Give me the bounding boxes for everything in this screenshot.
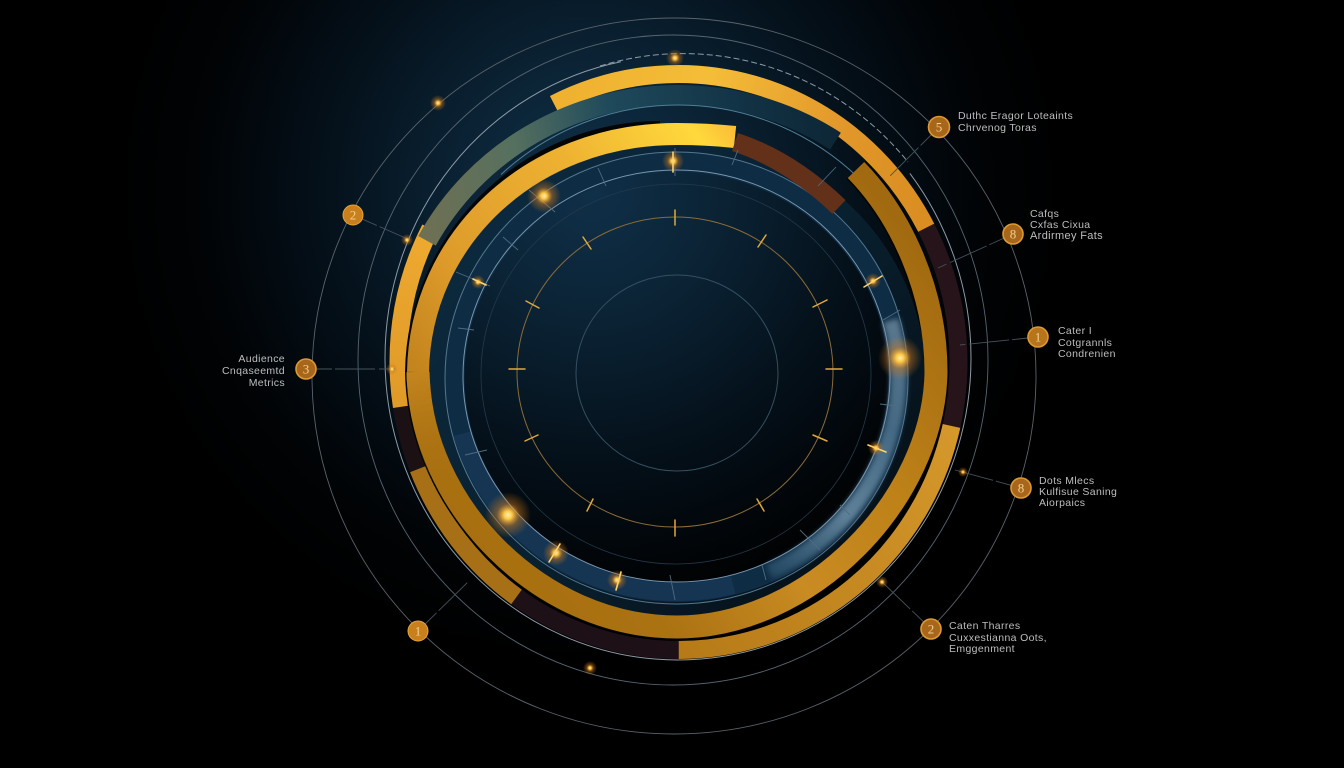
outer ring segments <box>398 74 958 650</box>
node 7: upper left: 2 <box>350 208 356 222</box>
blue band ring <box>439 148 915 612</box>
node 7: upper left <box>343 205 363 225</box>
node 2: upper right: Cafqs <box>1030 208 1059 220</box>
central circles <box>517 217 833 527</box>
outer segment: left bright gold <box>398 74 958 650</box>
node 6: bottom left <box>408 621 428 641</box>
node 8: left: Cnqaseemtd <box>222 365 285 377</box>
connector lines <box>306 127 1038 631</box>
outer thin rings <box>312 18 1036 734</box>
inner segment: left fade overlay <box>418 372 445 482</box>
inner ring dark gap <box>418 134 936 627</box>
inner segment: lower gold <box>418 170 936 627</box>
node 6: bottom left: 1 <box>415 624 421 638</box>
node 2: upper right: Cxfas Cixua <box>1030 219 1090 231</box>
node 8: left: 3 <box>303 362 309 376</box>
outer segment: lower right gold <box>398 74 958 650</box>
node 1: top right: 5 <box>936 120 942 134</box>
node 8: left: Metrics <box>249 377 285 389</box>
node 5: bottom right: Cuxxestianna Oots, <box>949 632 1047 644</box>
node 4: lower right: Kulfisue Saning <box>1039 486 1117 498</box>
teal band segment <box>393 95 963 649</box>
teal band lower hairline <box>415 105 941 639</box>
node 3: right: 1 <box>1035 330 1041 344</box>
node 4: lower right <box>1011 475 1117 509</box>
node 3: right <box>1028 325 1116 360</box>
outer segment: lower left gold <box>398 74 958 650</box>
node 5: bottom right <box>921 619 1047 655</box>
node 4: lower right: Dots Mlecs <box>1039 475 1094 487</box>
sparkle glows <box>386 49 968 675</box>
inner segment: upper bright gold <box>418 134 735 372</box>
outer segment: right dark <box>398 74 958 650</box>
band inner hairlines <box>445 152 908 604</box>
radial scale ticks <box>456 148 900 600</box>
node 3: right: Condrenien <box>1058 348 1116 360</box>
node 4: lower right: 8 <box>1018 480 1024 496</box>
highlighted textured band section <box>454 162 898 592</box>
node 5: bottom right: Caten Tharres <box>949 620 1020 632</box>
node 5: bottom right: 2 <box>928 622 934 636</box>
node 1: top right <box>928 110 1073 138</box>
node 2: upper right <box>1003 208 1103 244</box>
gold ticks on central ring <box>509 210 842 536</box>
outer segment: left dark <box>398 74 958 650</box>
node 2: upper right: Ardirmey Fats <box>1030 230 1103 242</box>
node 1: top right: Chrvenog Toras <box>958 122 1037 134</box>
outer segment: upper gold <box>398 74 958 650</box>
node 2: upper right: 8 <box>1010 226 1016 242</box>
lower-left brighter band section <box>454 162 898 592</box>
node 5: bottom right: Emggenment <box>949 643 1015 655</box>
node 3: right: Cater I <box>1058 325 1092 337</box>
inner segment: brown <box>735 142 839 207</box>
node 8: left: Audience <box>238 353 285 365</box>
node 8: left <box>222 353 316 389</box>
inner ring segments <box>418 134 936 627</box>
node 3: right: Cotgrannls <box>1058 337 1112 349</box>
sparkle streaks <box>473 152 886 590</box>
node 1: top right: Duthc Eragor Loteaints <box>958 110 1073 122</box>
node 4: lower right: Aiorpaics <box>1039 497 1085 509</box>
outer segment: bottom dark <box>398 74 958 650</box>
